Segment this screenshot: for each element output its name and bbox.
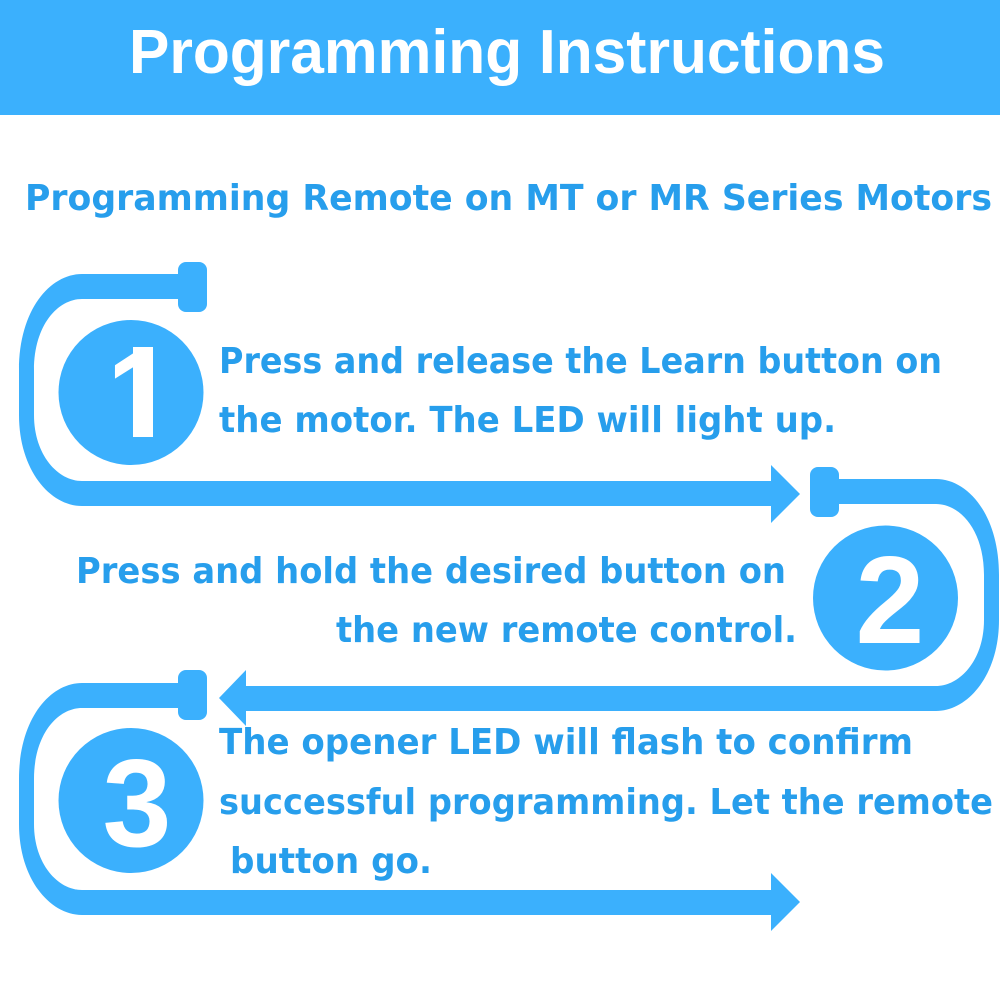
icon: number 3: 3 xyxy=(103,735,171,873)
step 3 text: button go. xyxy=(230,841,432,882)
subtitle: Programming Remote on MT or MR Series Motors xyxy=(25,178,992,219)
header banner xyxy=(0,0,1000,115)
step 3 text xyxy=(219,722,993,882)
title: Programming Instructions xyxy=(129,18,885,87)
step 2 text: the new remote control. xyxy=(336,610,797,651)
icon: number 3 xyxy=(58,728,204,873)
icon: number 1 xyxy=(58,320,204,465)
icon: number 2 xyxy=(813,526,958,670)
step 1 text xyxy=(219,341,942,441)
step 1 text: the motor. The LED will light up. xyxy=(219,400,836,441)
step 2 text xyxy=(76,551,797,651)
arrow: step 2 loop xyxy=(219,467,999,726)
arrow: step 1 loop xyxy=(19,262,800,523)
arrow: step 3 loop xyxy=(19,670,800,931)
icon: number 1: 1 xyxy=(107,326,175,464)
step 1 text: Press and release the Learn button on xyxy=(219,341,942,382)
step 3 text: The opener LED will flash to confirm xyxy=(219,722,913,763)
icon: number 2: 2 xyxy=(856,532,924,670)
step 2 text: Press and hold the desired button on xyxy=(76,551,786,592)
